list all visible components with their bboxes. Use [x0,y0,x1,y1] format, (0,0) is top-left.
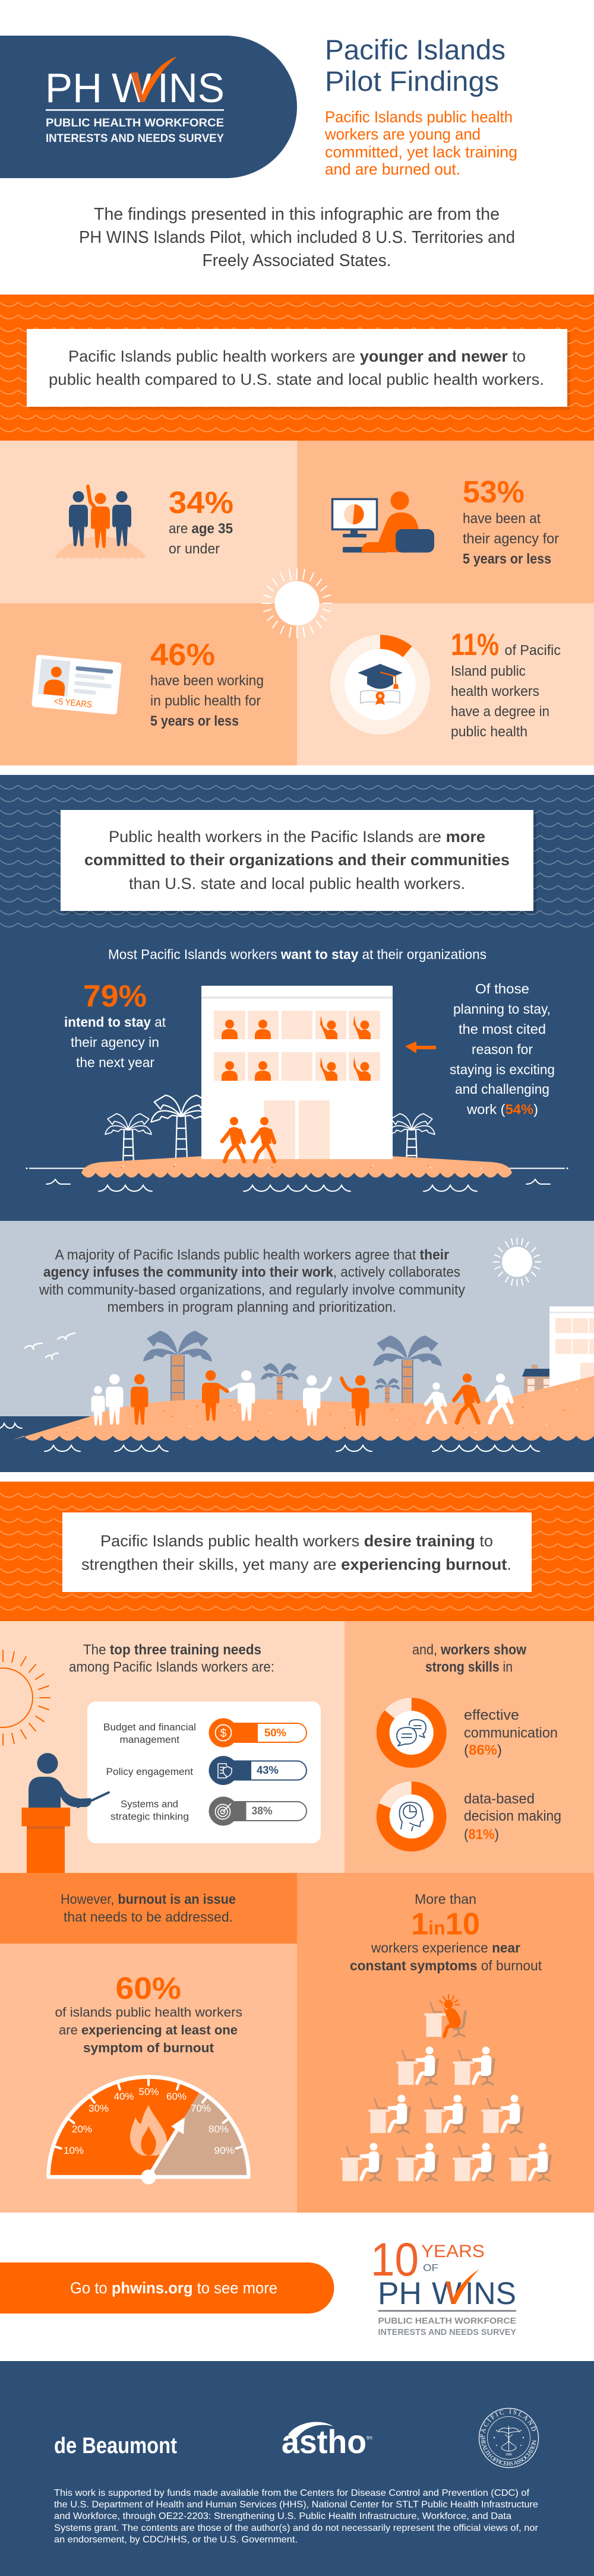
community text: A majority of Pacific Islands public health workers agree that their [55,1247,449,1263]
burnout heading: that needs to be addressed. [64,1909,233,1925]
logo: seal: HEALTH OFFICERS ASSOCIATION [481,2438,536,2466]
logo: de Beaumont: de Beaumont [54,2433,177,2458]
logo: 10 years of PH WINS: OF [423,2262,438,2273]
item: budget 50%: Budget and financial [103,1721,196,1733]
title: Pacific Islands [325,34,505,65]
icon: person at computer [333,492,434,552]
banner text: public health compared to U.S. state and local public health workers. [49,371,544,388]
heading: strong skills: strong skills in [425,1659,513,1675]
logo: 10 years of PH WINS: PUBLIC HEALTH WORKFORCE [378,2316,516,2326]
panel: training needs [0,1621,345,1873]
community people [91,1371,511,1426]
gauge chart: 80% [208,2124,229,2135]
stat: 1 in 10 [350,1891,542,1973]
stat: 79% [64,979,166,1070]
panel: one in ten [297,1873,594,2213]
illustration: palms behind building [105,1095,435,1164]
gauge chart: 90% [214,2145,235,2156]
logo badge: PH WINS: INS [157,65,225,111]
logo: seal: 1986 [505,2453,512,2457]
title: Pilot Findings [325,65,499,97]
subtitle [324,108,517,178]
disclaimer: an endorsement, by CDC/HHS, or the U.S. Government. [54,2535,298,2545]
disclaimer: and Workforce, through OE22-2203: Strengthening U.S. Public Health Infrastructure, Workforce, and Data [54,2511,511,2521]
gauge chart [49,2076,248,2184]
panel: committed navy section [0,775,594,1221]
panel: strong skills [345,1621,594,1873]
icon: outlined sun [0,1650,50,1745]
stat: 53%: 53% [463,475,525,509]
logo badge: PH WINS: W [112,65,151,111]
burnout heading: However, burnout is an issue [61,1891,236,1907]
stat: 53% [463,475,559,567]
disclaimer: the U.S. Department of Health and Human Services (HHS), National Center for STLT Public Health Infrastructure [54,2500,538,2509]
arrow [406,1042,435,1052]
disclaimer: Systems grant. The contents are those of the author(s) and do not necessarily represent the official views of, nor [54,2523,539,2533]
logo badge: PH WINS: INTERESTS AND NEEDS SURVEY [46,132,224,145]
stat: decision making: data-based [464,1791,535,1807]
stat: decision making [464,1791,561,1843]
stat: 53%: their agency for [463,531,559,547]
stat: communication: (86%) [464,1742,502,1758]
stat: 79%: 79% [83,979,147,1014]
logo: 10 years of PH WINS: INS [465,2276,516,2311]
disclaimer [54,2488,539,2545]
item: budget 50% [103,1719,307,1747]
stat: 60% [55,1971,242,2055]
stat: 79%: their agency in [71,1034,159,1050]
callout: reason for staying: Of those [475,981,529,996]
stat: 60%: 60% [115,1971,181,2006]
community text: members in program planning and prioritization. [107,1299,396,1315]
icon: burned-out worker [424,1995,466,2037]
intro text [79,205,515,270]
stat: 53%: 5 years or less [463,551,551,567]
stat: decision making: (81%) [464,1827,499,1843]
logo: 10 years of PH WINS: PH [378,2276,422,2311]
stat: communication: effective [464,1707,519,1723]
stat: 46%: have been working [150,673,264,689]
stat: 11%: of Pacific [505,643,561,659]
item: policy 43% [106,1756,307,1785]
logo badge: PH WINS [0,36,297,178]
logo: 10 years of PH WINS: 10 [371,2233,419,2286]
subtitle: committed, yet lack training [325,143,517,161]
gauge chart: 50% [138,2086,159,2097]
stat: 11%: public health [451,724,527,740]
callout: reason for staying: staying is exciting [450,1062,555,1077]
stat: 34%: or under [169,541,220,557]
item: budget 50%: 50% [264,1727,286,1739]
stat: 11%: health workers [451,683,539,700]
stat: 34% [169,486,233,557]
item: budget 50%: management [120,1734,179,1745]
logo: astho: astho [282,2423,366,2460]
stat: 11%: have a degree in [451,704,549,720]
icon: ID card [31,654,122,715]
stat: 79%: intend to stay at [64,1014,166,1030]
icon: speaker at podium [21,1753,109,1873]
gauge chart: 10% [64,2145,84,2156]
heading: want to stay: Most Pacific Islands workers want to stay at their organizations [108,947,486,962]
illustration: beach [13,1376,594,1441]
stat: 11%: Island public [451,663,526,679]
intro text: Freely Associated States. [202,251,391,270]
heading: strong skills: and, workers show [412,1642,527,1658]
logo: 10 years of PH WINS: W [432,2276,462,2311]
donut chart: decision making 81% [383,1788,440,1845]
panel: training banner [0,1482,594,1621]
logo: 10 years of PH WINS [371,2233,516,2337]
community text: with community-based organizations, and regularly involve community [39,1282,466,1298]
intro text: The findings presented in this infographic are from the [94,205,500,224]
illustration: house and building [522,1306,594,1395]
panel: younger and newer banner [0,295,594,441]
banner text: Pacific Islands public health workers desire training to [100,1532,493,1550]
panel: four statistics [0,441,594,765]
logo: 10 years of PH WINS: YEARS [421,2242,485,2261]
heading: strong skills [412,1642,527,1675]
item: policy 43%: Policy engagement [106,1766,193,1777]
community text [39,1247,466,1315]
banner text [81,1532,511,1574]
item: systems 38% [110,1797,307,1825]
callout: reason for staying: the most cited [459,1021,546,1037]
subtitle: workers are young and [324,125,481,143]
banner text: committed to their organizations and their communities [84,851,510,869]
callout: reason for staying: work (54%) [466,1102,538,1117]
stat: 46%: 46% [150,638,215,672]
icon: degree donut [337,642,423,727]
stat: 11%: 11% [451,628,499,662]
stat: 1 in 10: constant symptoms of burnout [350,1958,542,1973]
heading: top three training needs: The top three training needs [83,1642,261,1658]
gauge chart: 40% [113,2091,134,2102]
banner text: than U.S. state and local public health workers. [129,875,465,893]
callout: reason for staying: reason for [472,1042,533,1057]
stat: communication [464,1707,558,1758]
stat: 60%: symptom of burnout [83,2040,214,2055]
icon: birds [25,1333,75,1359]
subtitle: and are burned out. [325,160,460,178]
call to action [0,2262,334,2314]
stat: 60%: are experiencing at least one [59,2023,238,2037]
item: budget 50%: $ [220,1727,227,1740]
icon: sun [263,569,331,638]
small waves [0,1423,539,1451]
stat: 46% [150,638,264,729]
gauge chart: 60% [166,2091,187,2102]
callout: reason for staying [450,981,555,1117]
burnout heading [61,1891,236,1925]
stat: 1 in 10: 1in10 [411,1907,480,1942]
small waves [46,1179,550,1191]
banner text: strengthen their skills, yet many are experiencing burnout . [81,1556,511,1574]
icon: ID card: <5 YEARS [53,697,93,710]
title [325,34,505,97]
logo badge: PH WINS: PUBLIC HEALTH WORKFORCE [46,117,224,129]
subtitle: Pacific Islands public health [325,108,513,126]
illustration: building with windows [201,986,393,1162]
logo: seal: PACIFIC ISLAND [480,2409,536,2438]
item: policy 43%: 43% [257,1764,279,1776]
palms [143,1331,442,1406]
stat: decision making: decision making [464,1808,561,1824]
banner text [49,347,544,388]
panel: burnout gauge [0,1873,297,2213]
call to action: Go to phwins.org to see more [70,2279,277,2297]
icon: three people on island [55,486,146,558]
gauge chart: 70% [191,2103,211,2114]
card: training list [87,1702,321,1843]
callout: reason for staying: and challenging [455,1081,549,1097]
item: systems 38%: Systems and [121,1798,178,1810]
logo badge: PH WINS: PH [45,65,102,111]
gauge chart: 20% [72,2124,92,2135]
stat: 46%: in public health for [150,693,261,709]
item: systems 38%: 38% [252,1805,272,1817]
donut chart: communication 86% [383,1704,440,1761]
logo: astho: tm [366,2435,372,2441]
stat: 1 in 10: More than [415,1891,476,1907]
callout: reason for staying: planning to stay, [453,1001,551,1017]
stat: 34%: are age 35 [169,521,233,537]
logo: 10 years of PH WINS: INTERESTS AND NEEDS SURVEY [378,2327,516,2337]
icon group: nine workers at desks [341,2046,550,2181]
stat: 53%: have been at [463,511,541,527]
stat: 1 in 10: workers experience near [371,1940,520,1955]
panel: community scene [0,1221,594,1472]
panel: footer [0,2361,594,2576]
stat: 46%: 5 years or less [150,713,239,729]
item: systems 38%: strategic thinking [110,1811,189,1822]
banner text: Pacific Islands public health workers are younger and newer to [68,347,526,365]
disclaimer: This work is supported by funds made available from the Centers for Disease Control and Prevention (CDC) of [54,2488,530,2498]
community text: agency infuses the community into their work, actively collaborates [43,1264,460,1280]
panel: header [0,34,517,178]
gauge needle [141,2118,185,2184]
stat: communication: communication [464,1725,558,1741]
intro text: PH WINS Islands Pilot, which included 8 U.S. Territories and [79,228,515,247]
stat: 60%: of islands public health workers [55,2005,242,2020]
illustration: island [26,1156,568,1178]
banner text [84,828,510,893]
icon: sun [493,1238,541,1286]
stat: 34%: 34% [169,486,233,520]
banner text: Public health workers in the Pacific Islands are more [109,828,485,846]
logo: seal [479,2407,539,2468]
stat: 79%: the next year [76,1055,154,1070]
heading: top three training needs: among Pacific Islands workers are: [69,1659,274,1675]
gauge chart: 30% [89,2103,109,2114]
walking workers [222,1117,274,1162]
stat: 11% [451,628,561,740]
heading: top three training needs [69,1642,274,1675]
